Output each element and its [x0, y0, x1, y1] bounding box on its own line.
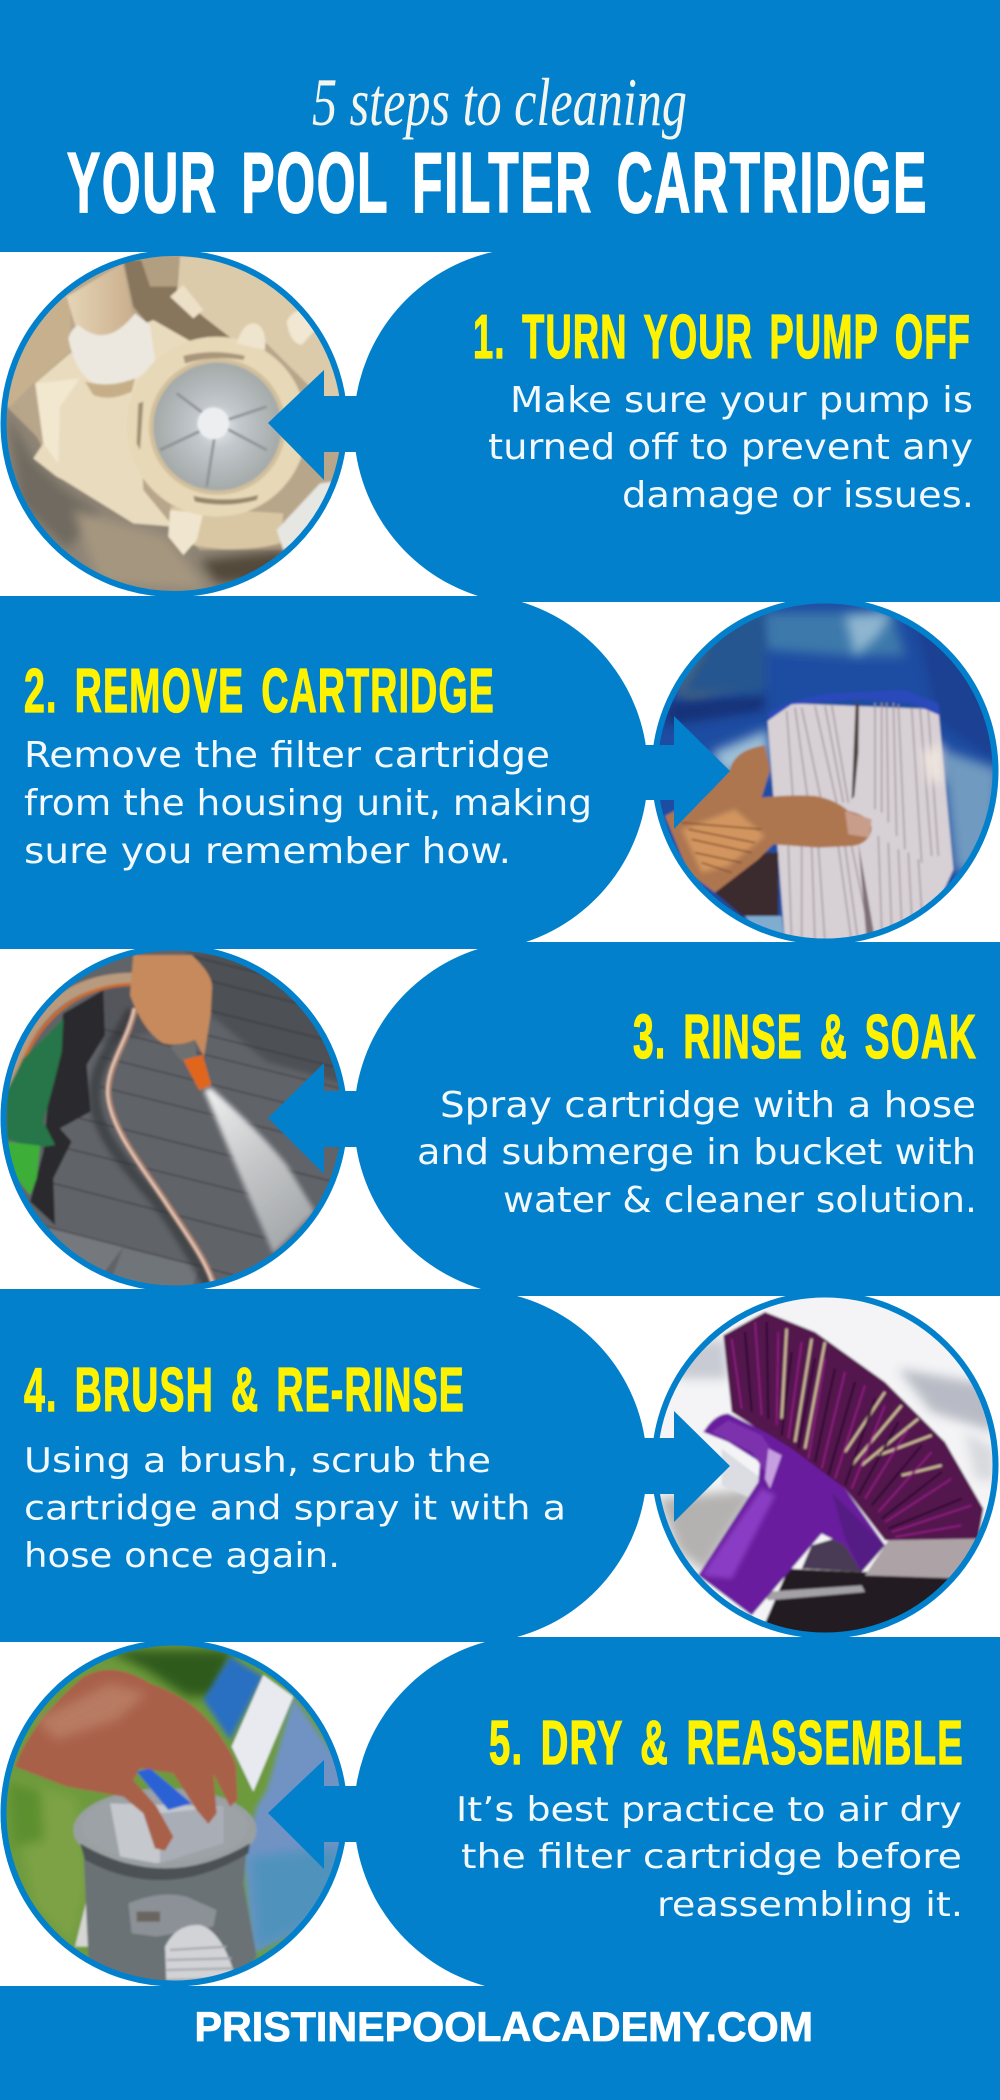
text: step 2 description: from the housing unit, making: [24, 783, 592, 824]
panel: step 1: [0, 250, 1000, 602]
panel: step 5: [0, 1637, 1000, 1990]
subtitle: 5 steps to cleaning: [312, 64, 687, 140]
text: step 4 description: Using a brush, scrub the: [24, 1441, 491, 1481]
photo: purple brush: [660, 1298, 992, 1632]
panel shape: step 4 blob: [0, 1289, 647, 1642]
text: step 1 description: [488, 380, 974, 516]
arrow: step 1: [268, 370, 360, 480]
text: step 4 description: [24, 1441, 566, 1576]
text: step 2 description: Remove the filter cartridge: [24, 735, 550, 776]
panel shape: step 3 blob: [354, 942, 1000, 1296]
text: step 5 description: reassembling it.: [657, 1885, 963, 1925]
panel shape: step 5 blob: [354, 1637, 1000, 1986]
footer band: [0, 1986, 1000, 2100]
arrow: step 4: [640, 1411, 730, 1522]
footer website: PRISTINEPOOLACADEMY.COM: [194, 2003, 813, 2050]
ring: photo 4 border: [654, 1294, 996, 1636]
photo: hand holding filter cartridge: [660, 604, 992, 938]
ring: photo 2 border: [654, 600, 996, 942]
text: step 5 description: the filter cartridge before: [461, 1837, 962, 1877]
text: step 2 description: sure you remember how.: [24, 831, 511, 872]
photo: spraying with hose: [0, 945, 360, 1295]
photo: pool pump: [6, 256, 340, 591]
panel shape: step 1 blob: [354, 251, 1000, 602]
text: step 3 description: [417, 1085, 977, 1221]
heading: step 4: 4. BRUSH & RE-RINSE: [24, 1356, 465, 1425]
text: step 3 description: Spray cartridge with a hose: [440, 1085, 976, 1126]
ring: photo 3 border: [4, 948, 344, 1288]
heading: step 2: 2. REMOVE CARTRIDGE: [24, 657, 495, 726]
arrow: step 2: [640, 716, 730, 829]
text: step 2 description: [24, 735, 592, 872]
text: step 5 description: [456, 1790, 963, 1925]
panel shape: step 2 blob: [0, 596, 648, 949]
text: step 1 description: damage or issues.: [622, 475, 974, 516]
panel: step 2: [0, 596, 1000, 949]
ring: photo 1 border: [4, 253, 344, 594]
text: step 3 description: and submerge in bucket with: [417, 1132, 976, 1173]
text: step 4 description: hose once again.: [24, 1536, 340, 1576]
ring: photo 5 border: [4, 1642, 344, 1984]
panel: step 4: [0, 1289, 1000, 1642]
text: step 4 description: cartridge and spray it with a: [24, 1488, 566, 1528]
photo: hand placing cartridge in housing: [0, 1640, 360, 1990]
text: step 5 description: It’s best practice to air dry: [456, 1790, 962, 1830]
text: step 1 description: Make sure your pump is: [510, 380, 973, 421]
text: step 1 description: turned off to prevent any: [488, 427, 973, 468]
arrow: step 3: [268, 1063, 360, 1174]
text: step 3 description: water & cleaner solution.: [503, 1180, 977, 1221]
panel: step 3: [0, 942, 1000, 1296]
header band: [0, 0, 1000, 252]
arrow: step 5: [268, 1760, 360, 1869]
